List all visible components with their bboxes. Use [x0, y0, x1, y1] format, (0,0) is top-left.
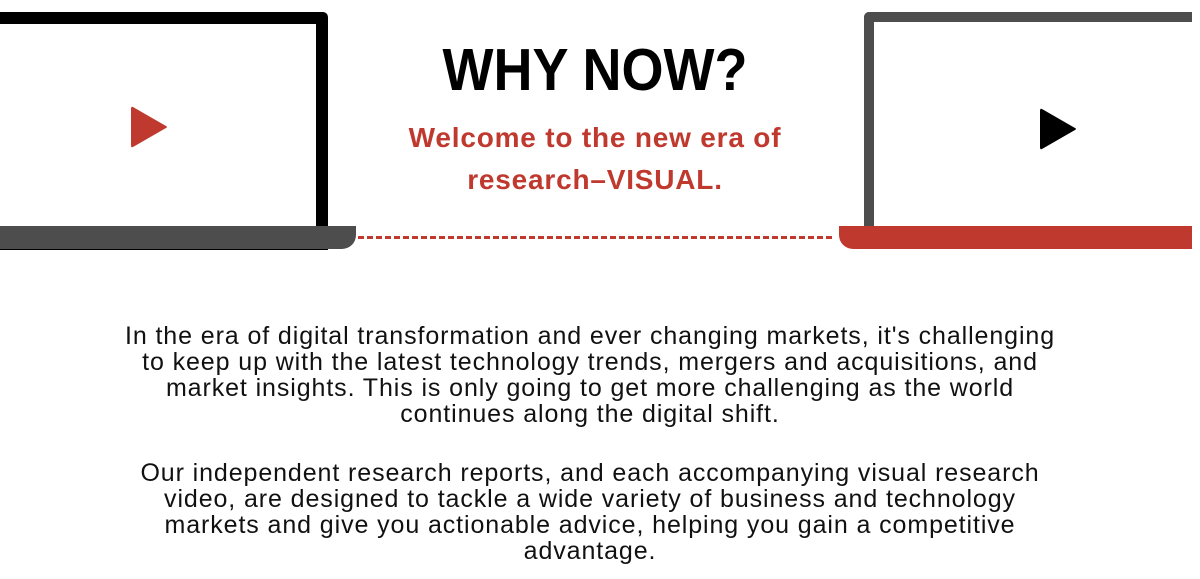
base left — [0, 226, 356, 249]
icon: black play — [1040, 108, 1076, 150]
dashed connector — [358, 236, 832, 239]
text block: offering paragraph — [140, 459, 1040, 565]
text block: intro paragraph: In the era of digital transformation and ever changing markets, it's challenging — [125, 322, 1055, 350]
text block: intro paragraph — [125, 322, 1055, 428]
text block: offering paragraph: video, are designed to tackle a wide variety of business and technology — [164, 485, 1016, 513]
laptop: right — [839, 12, 1192, 249]
text block: intro paragraph: continues along the digital shift. — [400, 400, 780, 428]
screen frame left — [0, 12, 328, 250]
text block: offering paragraph: advantage. — [524, 537, 656, 565]
laptop: left — [0, 12, 356, 250]
title: WHY NOW? — [443, 37, 747, 103]
text block: offering paragraph: markets and give you actionable advice, helping you gain a competitive — [164, 511, 1015, 539]
subtitle: Welcome to the new era of — [409, 122, 781, 153]
icon: red play — [131, 106, 167, 148]
text block: intro paragraph: to keep up with the latest technology trends, mergers and acquisitions, and — [142, 348, 1038, 376]
subtitle: research–VISUAL. — [467, 164, 723, 195]
base right — [839, 226, 1192, 249]
screen frame right — [864, 12, 1192, 226]
text block: intro paragraph: market insights. This is only going to get more challenging as the world — [166, 374, 1014, 402]
subtitle — [408, 122, 781, 195]
text block: offering paragraph: Our independent research reports, and each accompanying visual research — [140, 459, 1040, 487]
